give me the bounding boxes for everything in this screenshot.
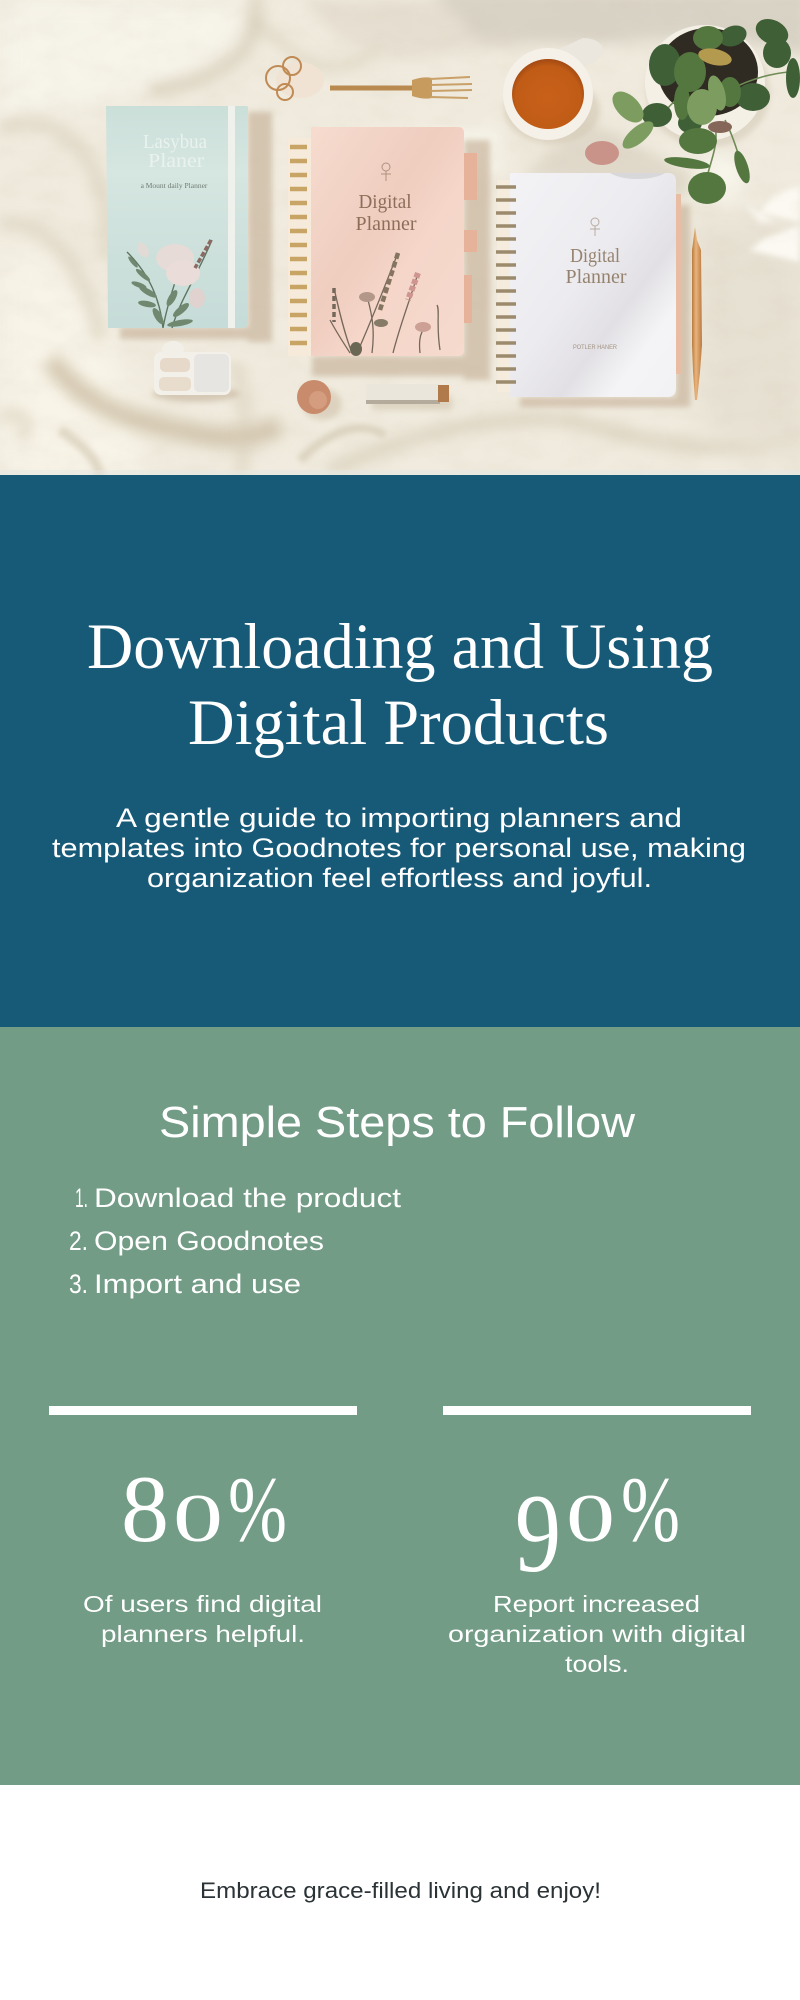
- 90% description: tools.: [565, 1651, 629, 1677]
- numbered steps list: Open Goodnotes: [94, 1226, 324, 1256]
- white planner coil: [496, 187, 516, 382]
- rose petal: [585, 141, 619, 165]
- panel: title section: [0, 475, 800, 1027]
- subtitle: organization feel effortless and joyful.: [147, 863, 652, 893]
- peach page edge: [676, 194, 681, 374]
- pink planner coil: [290, 147, 307, 343]
- panel: steps and stats: [0, 1027, 800, 1785]
- copper coin: [297, 380, 342, 420]
- stat: 90 percent: [443, 1406, 751, 1677]
- numbered steps list: 2.: [69, 1226, 88, 1256]
- teal planner: [106, 106, 248, 328]
- main title: [87, 611, 713, 759]
- 80% figure: 0: [173, 1480, 223, 1556]
- gold fork and ornament: [266, 57, 472, 100]
- teal planner title: Lasybua: [143, 131, 207, 153]
- subtitle: A gentle guide to importing planners and: [116, 803, 682, 833]
- main title: Digital Products: [188, 687, 609, 759]
- potted plant: [607, 14, 800, 204]
- gold pen: [692, 227, 702, 400]
- subtitle: [52, 803, 746, 893]
- main title: Downloading and Using: [87, 611, 713, 683]
- subtitle: templates into Goodnotes for personal use, making: [52, 833, 746, 863]
- 90% figure: 0: [566, 1480, 615, 1556]
- teal planner flowers: [127, 240, 212, 328]
- steps heading: Simple Steps to Follow: [159, 1098, 635, 1147]
- pink spiral planner: [288, 127, 477, 356]
- numbered steps list: 1.: [75, 1183, 88, 1213]
- 80% description: Of users find digital: [83, 1591, 322, 1617]
- 80% description: planners helpful.: [101, 1621, 305, 1647]
- hero bottom edge: [26, 470, 352, 475]
- white planner title: Digital: [570, 245, 620, 267]
- pink planner title line two: Planner: [356, 213, 417, 235]
- tea cup: [503, 38, 604, 144]
- 90% description: Report increased: [493, 1591, 700, 1617]
- white planner footer text: POTLER HANER: [573, 344, 617, 351]
- 80% figure: %: [228, 1459, 287, 1562]
- stat: 80 percent: [49, 1406, 357, 1647]
- pink planner flowers: [330, 253, 440, 356]
- closing message: Embrace grace-filled living and enjoy!: [200, 1878, 601, 1903]
- white planner title line two: Planner: [566, 266, 627, 288]
- 90% figure: 9: [515, 1472, 561, 1596]
- 90% description: [448, 1591, 746, 1677]
- numbered steps list: Import and use: [94, 1269, 301, 1299]
- 90% description: organization with digital: [448, 1621, 746, 1647]
- pink planner side tabs: [464, 153, 477, 323]
- hero photo: planners on linen: [0, 0, 800, 480]
- ceramic tray with bird: [152, 341, 240, 402]
- white spiral planner: [496, 173, 681, 397]
- teal planner subtitle: Planer: [148, 150, 204, 172]
- icon: ankh on pink planner: [381, 163, 391, 181]
- numbered steps list: [69, 1183, 402, 1299]
- 80% figure: 8: [121, 1456, 169, 1562]
- icon: ankh on white planner: [590, 218, 600, 236]
- teal planner tagline: a Mount daily Planner: [141, 181, 208, 190]
- numbered steps list: Download the product: [94, 1183, 402, 1213]
- lipstick tube: [366, 384, 452, 410]
- pink planner title: Digital: [358, 191, 412, 213]
- numbered steps list: 3.: [69, 1269, 88, 1299]
- 80% description: [83, 1591, 322, 1647]
- 90% figure: %: [621, 1459, 680, 1562]
- book shadows: [120, 112, 690, 407]
- linen fabric background: [0, 0, 800, 480]
